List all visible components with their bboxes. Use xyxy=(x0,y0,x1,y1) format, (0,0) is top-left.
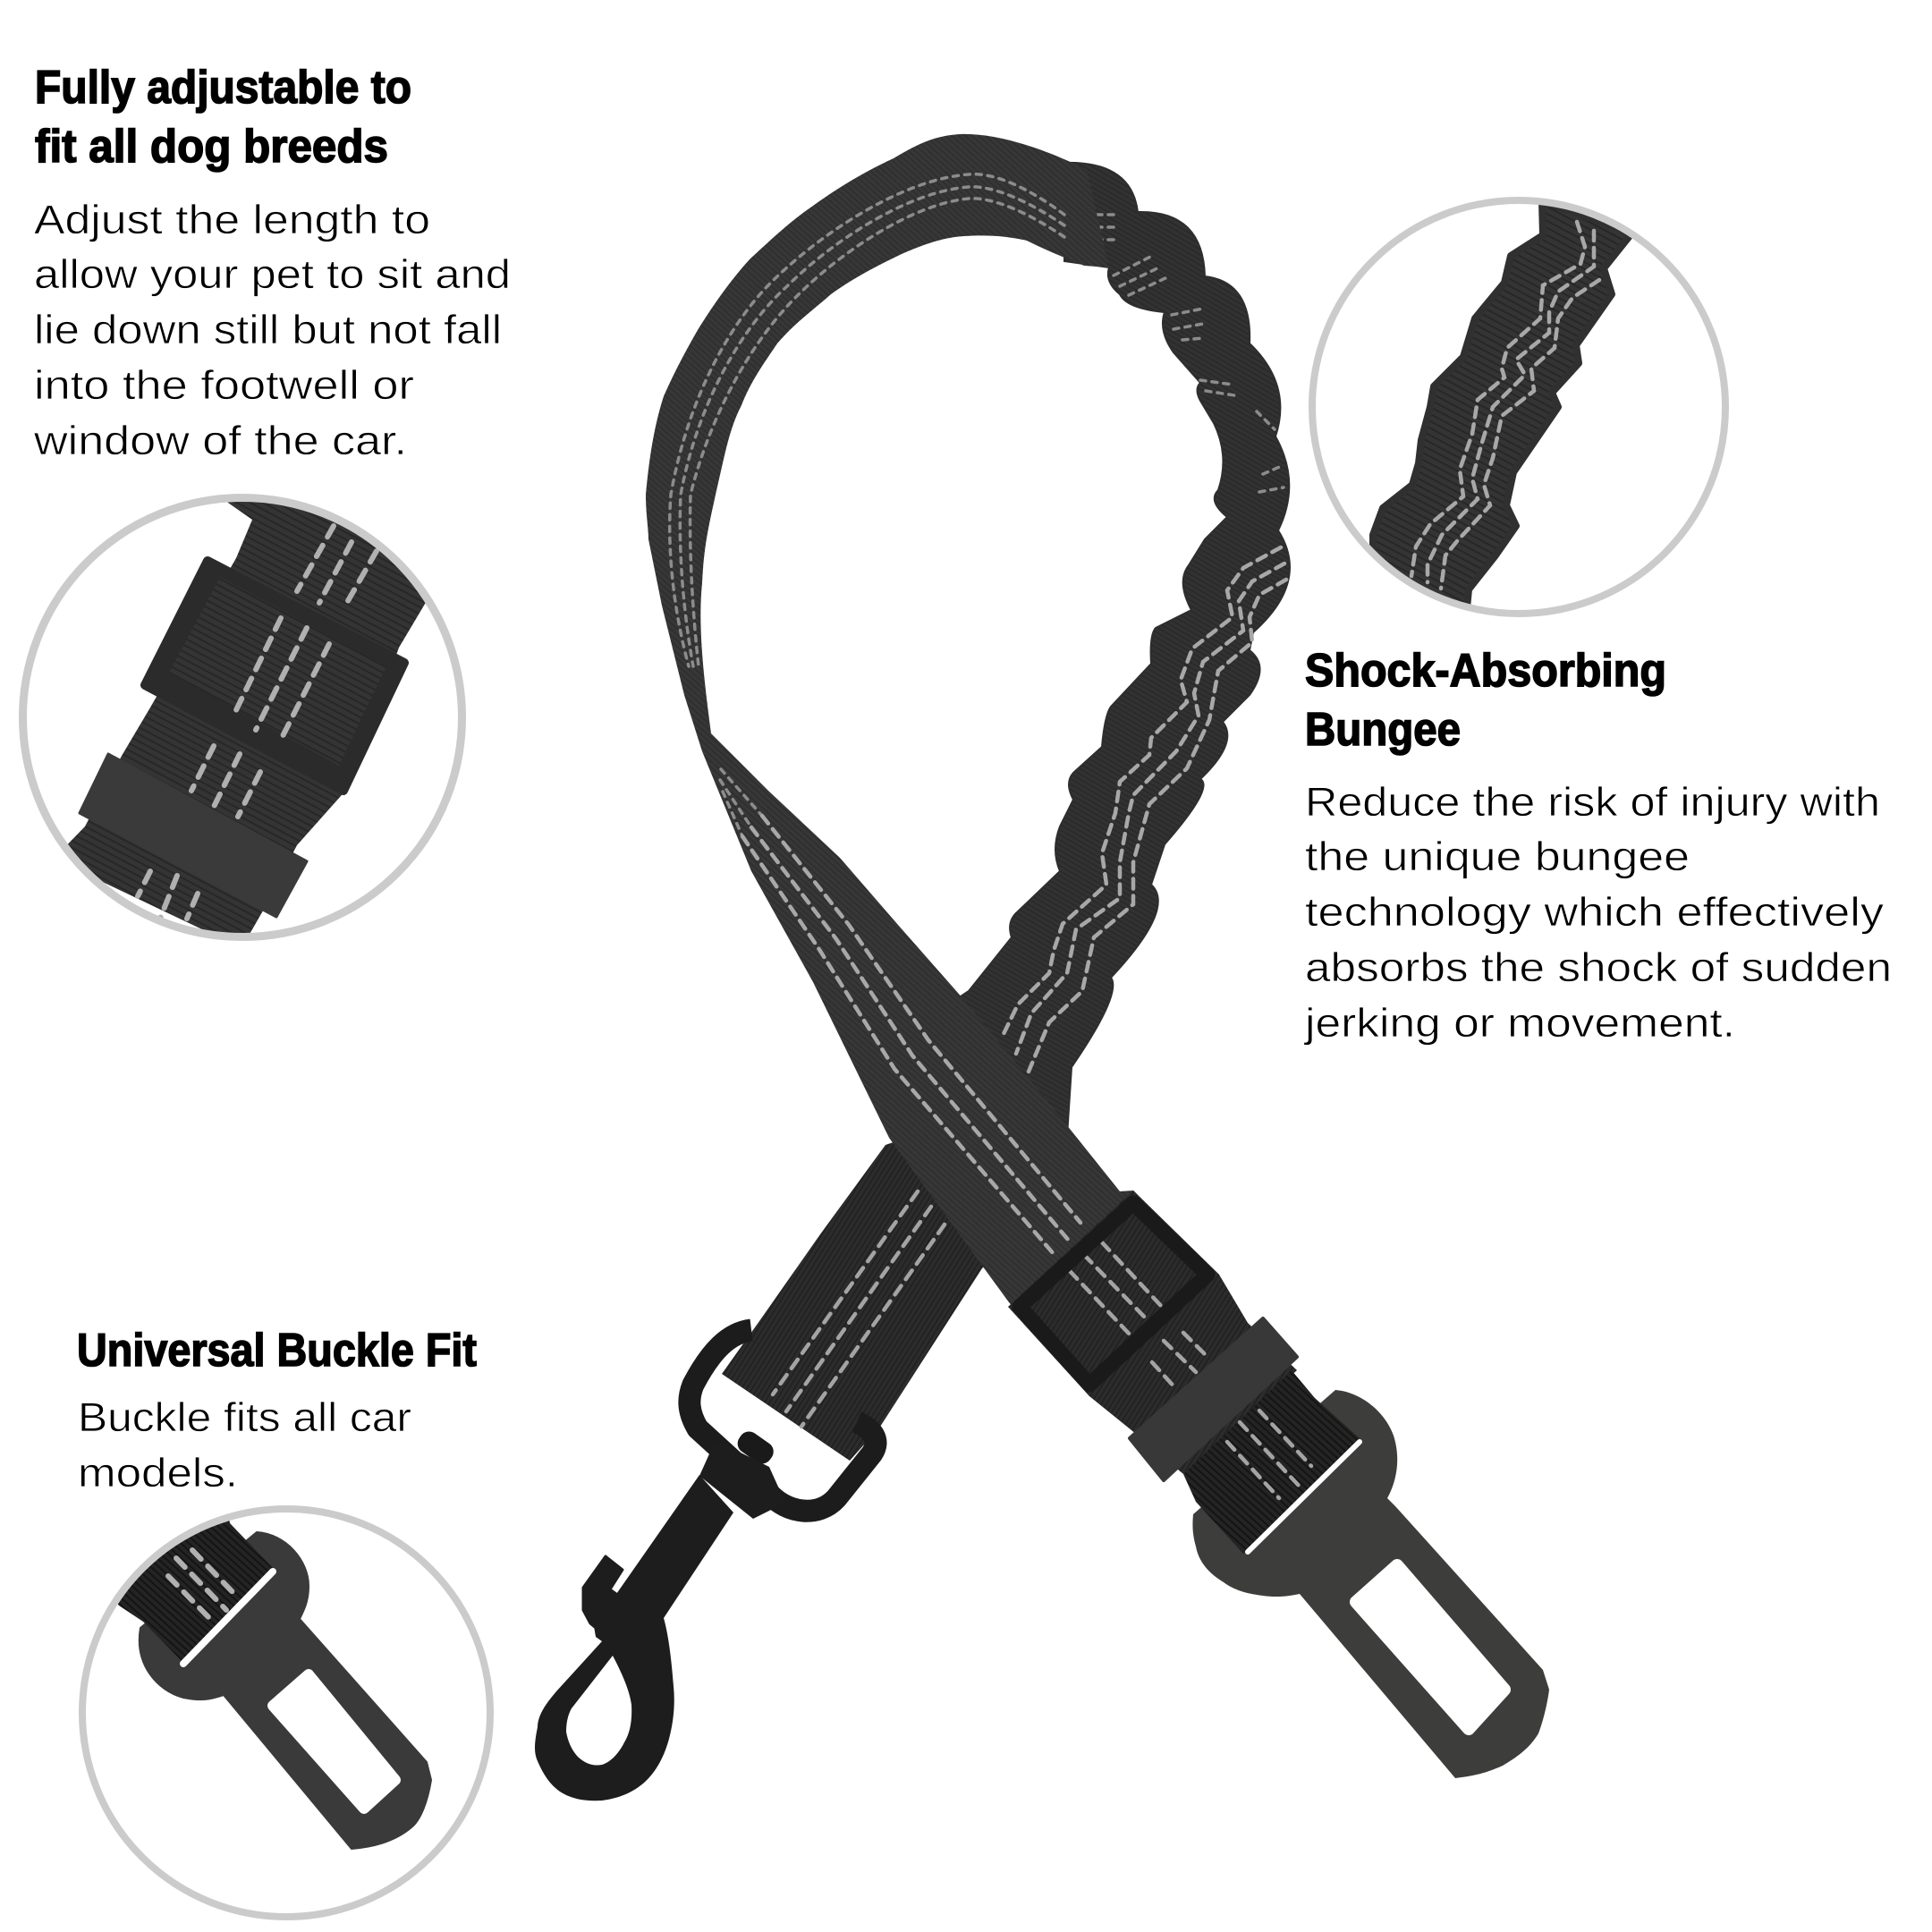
text: adjustable description: Adjust the length to xyxy=(34,197,430,242)
bungee section xyxy=(939,163,1290,1136)
leash product illustration xyxy=(535,134,1549,1801)
text: adjustable description: allow your pet to sit and xyxy=(34,251,511,297)
adjuster slider xyxy=(1020,1203,1208,1385)
text: bungee description xyxy=(1303,779,1892,1046)
text: bungee description: Reduce the risk of injury with xyxy=(1305,779,1880,825)
inset: buckle close-up xyxy=(82,1485,490,1917)
inset: bungee close-up xyxy=(1312,200,1725,617)
heading: fully adjustable: fit all dog breeds xyxy=(35,121,388,173)
main strap xyxy=(646,134,1219,1396)
text: adjustable description: into the footwell or xyxy=(34,362,414,408)
keeper loop xyxy=(1130,1318,1297,1480)
heading: shock-absorbing xyxy=(1305,645,1666,756)
heading: universal buckle fit: Universal Buckle Fit xyxy=(77,1325,477,1377)
d-ring xyxy=(690,1330,876,1511)
text: bungee description: absorbs the shock of sudden xyxy=(1305,945,1892,990)
text: buckle description: models. xyxy=(78,1450,238,1496)
text: adjustable description xyxy=(33,197,511,463)
text: bungee description: jerking or movement. xyxy=(1303,1000,1735,1046)
heading: fully adjustable xyxy=(35,62,411,173)
heading: shock-absorbing: Shock-Absorbing xyxy=(1305,645,1666,697)
heading: shock-absorbing: Bungee xyxy=(1305,704,1461,756)
webbing to buckle xyxy=(1008,1191,1297,1474)
snap hook xyxy=(535,1428,785,1801)
inset: adjuster close-up xyxy=(23,474,462,948)
left strap webbing xyxy=(722,1136,1002,1461)
text: bungee description: the unique bungee xyxy=(1305,834,1690,879)
heading: fully adjustable: Fully adjustable to xyxy=(35,62,411,114)
text: adjustable description: lie down still but not fall xyxy=(34,307,502,352)
text: adjustable description: window of the car. xyxy=(33,418,407,463)
text: bungee description: technology which effectively xyxy=(1305,889,1885,935)
seat belt buckle xyxy=(1183,1370,1549,1778)
text: buckle description: Buckle fits all car xyxy=(78,1394,411,1440)
text: buckle description xyxy=(78,1394,411,1496)
